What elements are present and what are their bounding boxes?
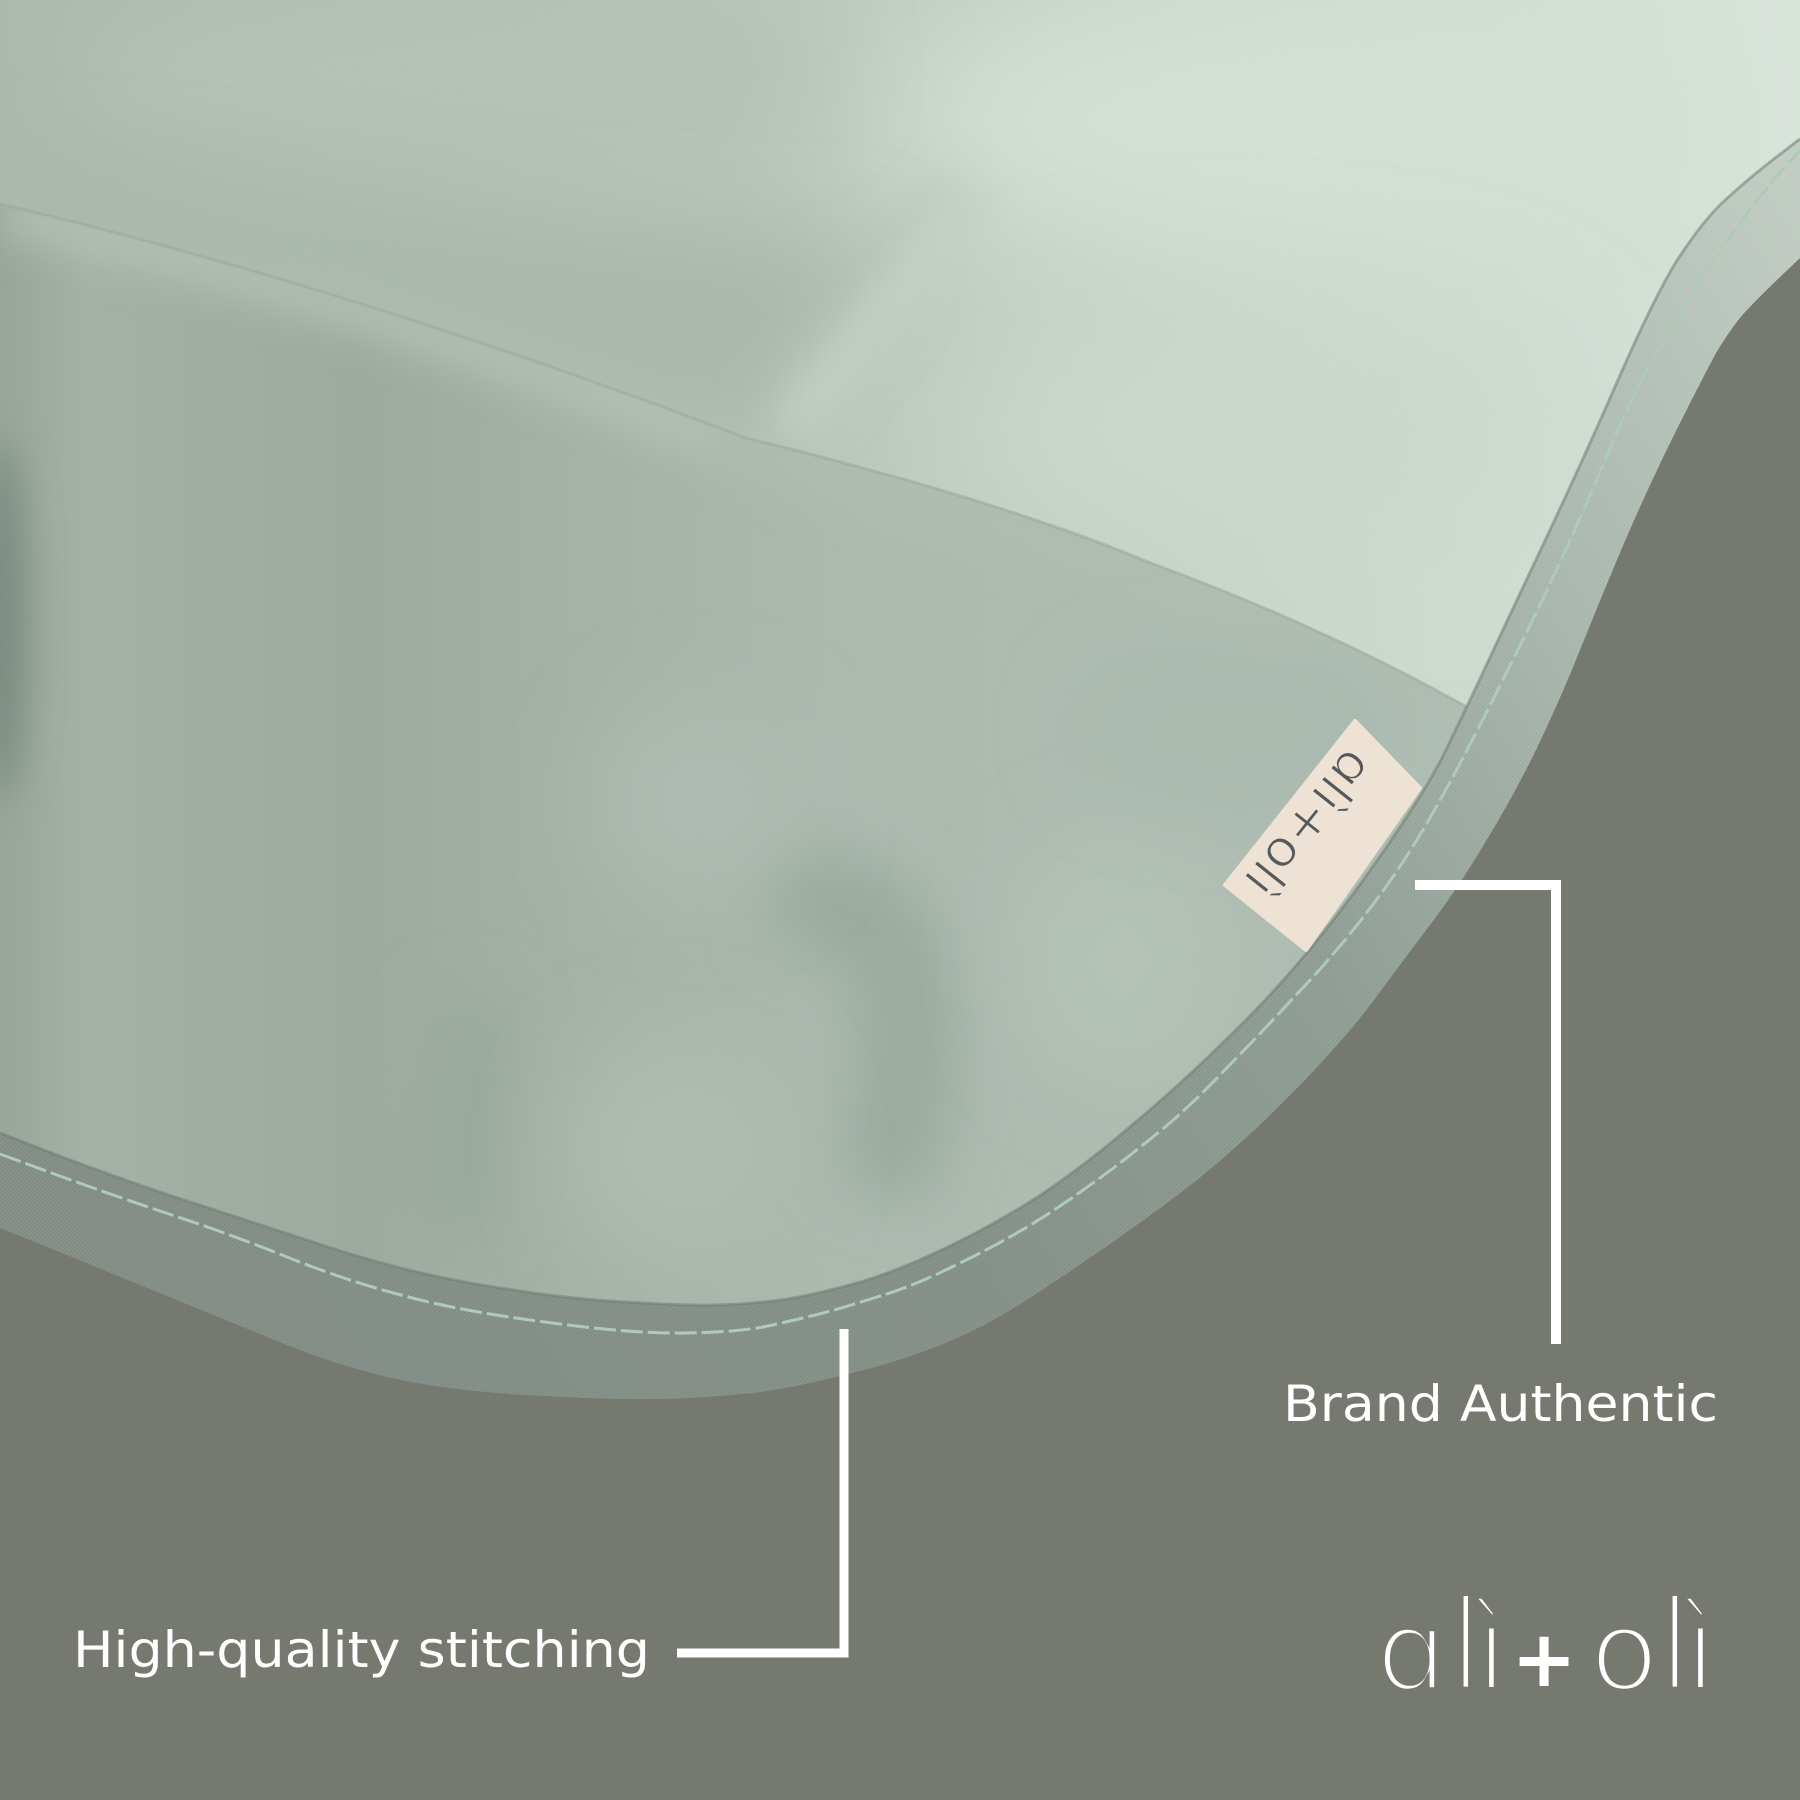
fold shadow along pocket top <box>0 204 1467 707</box>
back panel of bib <box>0 0 1800 706</box>
stitching <box>0 150 1800 1333</box>
brand logo: ì <box>1471 1580 1508 1718</box>
front pocket panel <box>0 180 1500 1330</box>
binding edge of bib <box>0 0 1800 1399</box>
label: Brand Authentic: Brand Authentic <box>1283 1375 1718 1433</box>
inner edge of binding <box>0 139 1800 1305</box>
brand logo: l <box>1448 1572 1484 1721</box>
callout line: brand authentic <box>1415 885 1556 1344</box>
label: High-quality stitching: High-quality stitching <box>73 1621 650 1679</box>
brand logo: o <box>1590 1587 1659 1717</box>
bib product photo <box>0 0 1800 1399</box>
fabric brand tag <box>1225 721 1420 950</box>
brand logo: + <box>1511 1615 1577 1705</box>
brand logo: l <box>1657 1572 1693 1721</box>
tag wordmark: ɑlì+olì <box>1232 738 1385 909</box>
callout line: high-quality stitching <box>677 1329 844 1653</box>
brand logo <box>1376 1572 1717 1721</box>
brand logo: ì <box>1680 1580 1717 1718</box>
brand logo: ɑ <box>1376 1587 1447 1717</box>
